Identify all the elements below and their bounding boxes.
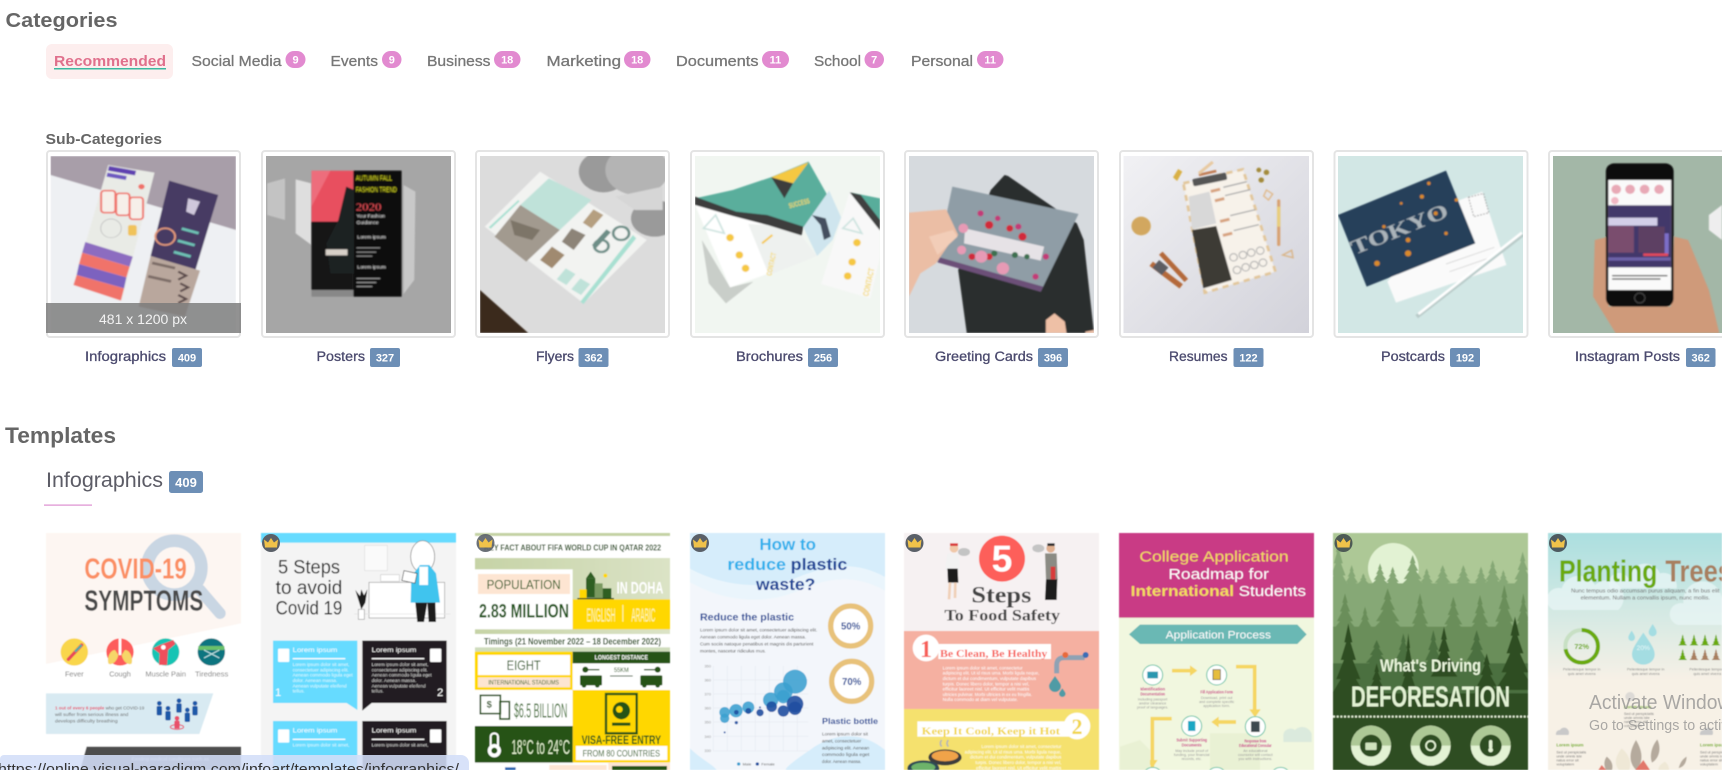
label: Resumes 122 — [1169, 348, 1264, 367]
bubble chart: 360 — [704, 706, 712, 711]
step 2: adipiscing elit. Ut id risus urna. Morbi ligula neque, — [965, 749, 1061, 754]
text: Plastic bottle: adipiscing elit. Aenean — [822, 745, 870, 750]
step 2 card: Lorem ipsum dolor sit amet, — [372, 662, 428, 667]
crown badge: card 4 — [691, 534, 709, 552]
title: How to reduce plastic waste?: reduce — [727, 555, 786, 574]
step 2 card: Aenean commodo ligula eget — [372, 673, 433, 678]
step: Response from Educational Consular: you with instructions. — [1238, 757, 1272, 761]
tab: Documents: Documents — [676, 53, 758, 70]
tab: Personal: 11 — [984, 54, 996, 66]
title: What's Driving: What's Driving — [1380, 656, 1481, 676]
header panel: Roadmap for — [1168, 566, 1269, 583]
heading: Templates: Templates — [5, 423, 116, 448]
intro text: Nunc tempus odio accumsan purus aliquam, a fin bus elit — [1571, 588, 1720, 594]
text: Reduce the plastic — [700, 613, 817, 654]
sub-category card: Flyers — [476, 145, 678, 367]
stat: 72% ring: 72% — [1574, 642, 1589, 651]
step: Fill Application Form: application form. — [1203, 704, 1230, 708]
step: Submit Supporting Documents: May include proof of — [1175, 749, 1209, 753]
callout: 1 out of every 6 people — [46, 693, 213, 734]
big 5 badge — [979, 536, 1025, 582]
icon: machinery ring — [1351, 726, 1391, 766]
step 2: dictum et dui condimentum, vulputate dapibus — [970, 755, 1062, 760]
ring: 70% — [832, 661, 872, 701]
step 3 card — [273, 721, 357, 770]
tab: Marketing — [546, 51, 650, 70]
visa panel — [573, 690, 670, 763]
info block: center: voluptatem — [1624, 724, 1642, 728]
label: Instagram Posts 362: Instagram Posts — [1575, 349, 1680, 364]
wave header — [690, 533, 885, 598]
label: Greeting Cards 396: Greeting Cards — [935, 349, 1033, 364]
forest layers — [1328, 540, 1535, 770]
info block: center — [1624, 692, 1654, 728]
crown badge: card 5 — [906, 534, 924, 552]
info block: center: natus error sit — [1624, 720, 1646, 724]
thumbnail: fashion poster on concrete: Your Fashion — [357, 214, 385, 219]
text: Plastic bottle: Plastic bottle — [822, 716, 878, 726]
illustration: doctor at desk — [354, 541, 451, 622]
longest distance panel: LONGEST DISTANCE — [595, 655, 648, 662]
text: Reduce the plastic: Lorem ipsum dolor sit amet, consectetuer adipiscing elit. — [700, 628, 817, 633]
size overlay: 481 x 1200 px — [46, 303, 241, 333]
tab: Social Media: 9 — [292, 54, 299, 66]
step 1 — [913, 635, 1089, 702]
illustration: waiter — [1032, 543, 1058, 600]
icon: tiredness — [198, 638, 225, 666]
header panel: Students — [1239, 583, 1306, 600]
step: Identification Documentation: including passport — [1138, 697, 1167, 701]
tab: Business: 18 — [501, 54, 513, 66]
label: Infographics 409: Infographics — [85, 349, 166, 364]
next step circles — [1143, 767, 1291, 770]
label: Infographics 409 — [85, 348, 202, 367]
size overlay: 481 x 1200 px: 481 x 1200 px — [99, 312, 187, 327]
text: Plastic bottle: commodo ligula eget — [822, 752, 870, 757]
thumbnail: Tokyo postcard — [1338, 156, 1523, 333]
sub-category card: Instagram Posts — [1549, 151, 1722, 367]
intro text: elementum. Nullam a convallis ipsum, nunc mollis. — [1581, 595, 1710, 601]
thumbnail: fashion poster on concrete: Lorem ipsum — [357, 235, 386, 240]
thumbnail: fashion poster on concrete — [266, 156, 451, 333]
crown badge: card 8 — [1549, 534, 1567, 552]
icon: people group — [157, 698, 198, 722]
stat: 20% water drop: Pellentesque tempor in — [1627, 668, 1664, 672]
step 1: adipiscing elit. Ut id risus urna. Morbi ligula neque, — [943, 671, 1039, 676]
bubble chart: 350 — [704, 664, 712, 669]
step 2: turpis. Donec libero dolor, tempor a nisi vel, — [975, 760, 1061, 765]
label: Greeting Cards 396 — [935, 348, 1068, 367]
step 4 card: Lorem ipsum — [372, 728, 417, 735]
info block: center: Sed ut perspiciatis — [1624, 712, 1654, 716]
tab: Personal: Personal — [911, 53, 973, 70]
tab: Social Media: Social Media — [192, 53, 282, 70]
label: Instagram Posts 362: 362 — [1692, 352, 1710, 364]
callout: 1 out of every 6 people: 1 out of every 6 people — [55, 706, 105, 711]
thumbnail: resume on clipboard — [1124, 156, 1309, 333]
thumbnail: infographic mockups — [50, 156, 236, 316]
symptom labels: Cough — [109, 670, 131, 679]
label: Postcards 192: 192 — [1456, 352, 1474, 364]
Activate Windows watermark — [1589, 692, 1722, 734]
template: 5 Steps to avoid Covid 19 — [261, 533, 456, 770]
budget panel: $ — [487, 700, 493, 710]
label: Postcards 192: Postcards — [1381, 349, 1445, 364]
step 1 card: Aenean commodo ligula eget — [293, 673, 354, 678]
step 2: 2 — [1072, 714, 1082, 739]
template: How to reduce plastic waste — [690, 533, 885, 770]
symptom labels: Muscle Pain — [145, 670, 186, 679]
stat: 20% water drop — [1627, 624, 1664, 676]
stat: tree counts — [1678, 634, 1722, 676]
title: Steps: Steps — [971, 583, 1031, 609]
tab: Recommended — [46, 44, 173, 79]
title: How to reduce plastic waste?: waste? — [755, 575, 815, 594]
title: 5 Steps to avoid Covid 19: to avoid — [276, 578, 342, 599]
title: 5 Steps to avoid Covid 19: 5 Steps — [278, 557, 340, 578]
template: FIFA World Cup facts — [475, 533, 670, 770]
thumbnail: teal flyer on marble table — [480, 156, 665, 333]
template: Planting Trees — [1547, 533, 1722, 770]
Doha panel: ENGLISH — [587, 605, 615, 626]
label: Resumes 122: Resumes — [1169, 349, 1228, 364]
step: Response from Educational Consular: counselor will contact — [1238, 753, 1273, 757]
tab: Marketing: Marketing — [546, 53, 621, 70]
magnifier — [147, 541, 220, 613]
text: Reduce the plastic: montes, nascetur ridiculus mus. — [700, 649, 766, 654]
info block: left — [1556, 728, 1586, 766]
tab: Events: Events — [330, 53, 378, 70]
info block: left: voluptatem — [1556, 762, 1574, 766]
step 2 card — [362, 641, 447, 711]
info block: left: Lorem ipsum — [1556, 743, 1584, 748]
tab: Events — [330, 51, 402, 70]
tab: Documents: 11 — [770, 54, 781, 66]
step 1: Be Clean, Be Healthy — [940, 649, 1048, 660]
title: 5 Steps to avoid Covid 19: Covid 19 — [276, 599, 342, 620]
label: Postcards 192 — [1381, 348, 1480, 367]
info block: center: unde omnis iste — [1624, 716, 1650, 720]
step: Identification Documentation: and/or clearance — [1139, 701, 1166, 705]
tab: School: School — [814, 53, 861, 70]
step: Fill Application Form: Fill Application Form — [1200, 689, 1233, 694]
template: COVID-19 Symptoms — [46, 533, 241, 770]
step 1: 1 — [920, 637, 932, 663]
thumbnail: fashion poster on concrete: 2020 — [356, 202, 382, 213]
big 5 badge: 5 — [992, 538, 1012, 580]
label: Posters 327: 327 — [376, 352, 394, 364]
bubble chart: Male — [743, 761, 752, 766]
step: Identification Documentation: Documentation — [1140, 691, 1165, 696]
step 2 card: tellus. — [372, 689, 384, 694]
tab: Business — [427, 51, 520, 70]
browser status bar URL — [0, 755, 469, 770]
title: To Food Safety: To Food Safety — [944, 608, 1060, 625]
step 1: efficitur laoreet nisl. Ut efficitur velit mattis — [943, 687, 1030, 692]
label: Brochures 256: Brochures — [736, 349, 803, 364]
label: Greeting Cards 396: 396 — [1044, 352, 1062, 364]
step: Submit Supporting Documents: records, etc. — [1182, 757, 1202, 761]
text: Reduce the plastic: Reduce the plastic — [700, 613, 794, 624]
heading: Sub-Categories: Sub-Categories — [46, 131, 162, 148]
step 1: Nulla commodo at diam vel vulputate. — [943, 697, 1018, 702]
banner: Application Process: Application Process — [1166, 630, 1271, 642]
crown badge: card 7 — [1334, 534, 1352, 552]
stadiums panel: INTERNATIONAL STADIUMS — [488, 680, 559, 687]
budget panel — [475, 690, 573, 726]
stat: 72% ring: quis amet viverra — [1568, 672, 1597, 676]
info block: right — [1700, 728, 1722, 766]
bubble chart: 350 — [704, 720, 712, 725]
callout: 1 out of every 6 people: who get COVID-19 — [106, 706, 145, 711]
tab: Documents — [676, 51, 789, 70]
thumbnail: greeting card and black envelope — [909, 156, 1094, 333]
step: Submit Supporting Documents — [1174, 716, 1210, 761]
step: Response from Educational Consular: Response from — [1244, 739, 1266, 744]
header panel: International — [1131, 583, 1234, 600]
info block: right: voluptatem — [1700, 762, 1718, 766]
bubble chart: 370 — [704, 692, 712, 697]
bottom wave — [690, 736, 885, 770]
step: Identification Documentation: proof of languages. — [1137, 705, 1168, 709]
stat: 20% water drop: 20% — [1637, 645, 1650, 652]
clouds — [1547, 564, 1722, 625]
stadiums panel: EIGHT — [507, 657, 541, 673]
population panel: 2.83 MILLION — [479, 601, 569, 622]
template: What's Driving Deforestation — [1328, 533, 1535, 770]
info block: right: natus error sit — [1700, 758, 1722, 762]
step 2 card: consectetuer adipiscing elit. — [372, 667, 428, 672]
icon: fever — [61, 638, 88, 666]
longest distance panel — [573, 652, 670, 690]
ring: 70%: 70% — [842, 677, 862, 688]
population panel: POPULATION — [487, 577, 561, 592]
title: 5 Steps to avoid Covid 19 — [276, 557, 342, 620]
banner: Application Process — [1129, 625, 1307, 644]
ring: 50%: 50% — [841, 622, 861, 633]
step: Submit Supporting Documents: funding, your financial — [1174, 753, 1210, 757]
step 1 card: tellus. — [293, 689, 305, 694]
heading: Categories: Categories — [6, 10, 118, 32]
step 2 card: dolor. Aenean massa. — [372, 678, 416, 683]
template: FIFA World Cup facts: $6.5 BILLION — [514, 700, 567, 722]
step 1: dictum et dui condimentum, vulputate dapibus — [943, 676, 1037, 681]
header panel — [1119, 533, 1314, 618]
title: COVID-19: COVID-19 — [84, 553, 187, 585]
temperature panel: 18°C to 24°C — [511, 737, 570, 759]
illustration: pots — [907, 740, 962, 770]
ring: 50% — [831, 606, 871, 646]
thumbnail: tri-fold brochures: CONTACT — [861, 267, 876, 297]
tab: School — [814, 51, 884, 70]
thumbnail: fashion poster on concrete: Lorem ipsum — [357, 265, 386, 270]
thumbnail: Tokyo postcard: TOKYO — [1347, 199, 1452, 260]
intro text — [1571, 588, 1720, 601]
label: Posters 327: Posters — [316, 349, 365, 364]
title: How to reduce plastic waste?: plastic — [791, 555, 847, 574]
icon: cough — [106, 638, 134, 666]
step 1: Lorem ipsum dolor sit amet, consectetur — [943, 665, 1023, 670]
sub-category card: Brochures — [691, 151, 884, 367]
subheading: Infographics 409 — [44, 469, 203, 506]
step: Response from Educational Consular: Educational Consular — [1239, 743, 1272, 748]
step 2: Lorem ipsum dolor sit amet, consectetur — [981, 744, 1062, 749]
icon: sun ring — [1411, 726, 1451, 766]
Doha panel — [573, 572, 670, 629]
step: Submit Supporting Documents: Submit Supporting — [1176, 738, 1207, 743]
symptom labels: Fever — [65, 670, 84, 679]
thumbnail: fashion poster on concrete: FASHION TREND — [356, 186, 397, 194]
step: Response from Educational Consular: An educational — [1243, 749, 1268, 753]
step: Response from Educational Consular — [1238, 717, 1273, 761]
thumbnail: fashion poster on concrete: AUTUMN FALL — [356, 174, 392, 182]
step 1 card: Aenean vulputate eleifend — [293, 683, 347, 688]
info block: left: Sed ut perspiciatis — [1556, 750, 1586, 754]
flow arrows — [1152, 667, 1255, 769]
label: Posters 327 — [316, 348, 400, 367]
sub-category card: Greeting Cards — [905, 151, 1098, 367]
dark panel — [80, 747, 241, 770]
tab: Recommended: Recommended — [54, 53, 166, 70]
step 1 card: Lorem ipsum dolor sit amet, — [293, 662, 349, 667]
sub-category card: Posters — [262, 151, 455, 367]
text: Plastic bottle: dolor. Aenean massa. — [822, 759, 861, 764]
step 4 card: Lorem ipsum dolor sit amet, — [372, 743, 428, 748]
label: Instagram Posts 362 — [1575, 348, 1716, 367]
tab: Marketing: 18 — [631, 54, 643, 66]
stadiums panel — [475, 652, 573, 690]
label: Brochures 256: 256 — [814, 352, 832, 364]
text: Reduce the plastic: Aenean commodo ligula eget dolor. Aenean massa. — [700, 635, 806, 640]
population panel — [475, 569, 573, 629]
info block: left: natus error sit — [1556, 758, 1579, 762]
label: Flyers 362: 362 — [584, 352, 603, 364]
subheading: Infographics 409: Infographics — [46, 469, 163, 492]
symptom labels: Tiredness — [195, 670, 229, 679]
longest distance panel: 55KM — [614, 667, 629, 674]
template: College Application Roadmap — [1119, 533, 1314, 770]
step: Fill Application Form — [1199, 665, 1234, 708]
tab: Business: Business — [427, 53, 490, 70]
subheading: Infographics 409: 409 — [175, 475, 197, 490]
step 2 card: Lorem ipsum — [372, 647, 417, 654]
step: Submit Supporting Documents: Documents — [1182, 743, 1202, 748]
callout: 1 out of every 6 people: will suffer from serious illness and — [55, 712, 129, 717]
text: Plastic bottle: Lorem ipsum dolor sit — [822, 732, 869, 737]
bottom row — [475, 763, 670, 770]
step 1 card: 1 — [275, 687, 281, 699]
template: 5 Steps To Food Safety — [904, 533, 1099, 770]
thumbnail: tri-fold brochures: SUCCESS — [788, 196, 811, 210]
step 1: turpis. Donec libero dolor, tempor a nisi vel, — [943, 681, 1029, 686]
step 3 card: Lorem ipsum dolor sit amet, — [293, 743, 349, 748]
sub-category card: Postcards — [1334, 151, 1528, 367]
icon: thermometer ring — [1471, 726, 1511, 766]
step: Fill Application Form: and complete specific — [1199, 700, 1234, 704]
title: How to reduce plastic waste?: How to — [759, 535, 816, 554]
header panel: College Application — [1139, 548, 1289, 565]
stat: 72% ring: Pellentesque tempor in — [1563, 668, 1600, 672]
step 1: ultricies pulvinar. Morbi ultricies in ex eu fringilla. — [943, 692, 1032, 697]
tab: Social Media — [192, 51, 306, 70]
info block: center: Lorem ipsum — [1624, 704, 1651, 709]
step 2 card: Aenean vulputate eleifend — [372, 683, 426, 688]
step 1 card: Lorem ipsum — [293, 647, 338, 654]
callout: 1 out of every 6 people: develops difficulty breathing — [55, 719, 118, 724]
step: Identification Documentation — [1137, 665, 1168, 709]
label: Infographics 409: 409 — [178, 352, 196, 364]
label: Brochures 256 — [736, 348, 838, 367]
text: Plastic bottle: amet, consectetuer — [822, 738, 862, 743]
step 1 card: dolor. Aenean massa. — [293, 678, 337, 683]
tab: Personal — [911, 51, 1004, 70]
title: Planting Trees: Planting — [1559, 555, 1657, 589]
stat: 72% ring — [1563, 630, 1600, 676]
step: Identification Documentation: Identification — [1140, 687, 1165, 692]
bubble chart — [704, 664, 808, 766]
step 2 — [907, 713, 1090, 770]
crown badge: card 2 — [262, 534, 280, 552]
dark panel: Existing medical conditions such as — [132, 757, 209, 762]
bubble chart: Female — [761, 761, 775, 766]
thumbnail: fashion poster on concrete: Guidance — [357, 220, 379, 226]
info block: left: unde omnis iste — [1556, 754, 1582, 758]
label: Resumes 122: 122 — [1239, 352, 1258, 364]
symptom labels — [65, 670, 229, 679]
step 1 card — [273, 641, 357, 710]
illustration: waitress — [945, 543, 970, 599]
thumbnail: tri-fold brochures — [695, 156, 880, 333]
step: Fill Application Form: Download, print out — [1201, 696, 1232, 700]
sub-category card: Resumes — [1120, 151, 1313, 367]
thumbnail: phone in hand — [1553, 156, 1722, 333]
bubble chart: 330 — [704, 748, 712, 753]
tab: School: 7 — [871, 54, 877, 66]
step 2 card: 2 — [437, 687, 443, 699]
faint city background — [1120, 727, 1312, 770]
step 2: Keep It Cool, Keep it Hot — [922, 725, 1060, 737]
premium crown badges — [262, 534, 1567, 552]
category tabs — [46, 44, 1004, 79]
label: Flyers 362: Flyers — [536, 349, 574, 364]
step 1 card: consectetuer adipiscing elit. — [293, 667, 349, 672]
step 3 card: Lorem ipsum — [293, 728, 338, 735]
leaves illustration — [1598, 739, 1687, 770]
icon: dripping faucet — [1049, 652, 1089, 697]
sub-category card: Infographics — [46, 151, 241, 367]
tab: Events: 9 — [389, 54, 395, 66]
step 4 card — [362, 721, 447, 770]
stat: 20% water drop: quis amet viverra — [1632, 672, 1661, 676]
text: Plastic bottle — [822, 716, 878, 764]
thumbnail: tri-fold brochures: CONTACT — [764, 251, 778, 276]
title: How to reduce plastic waste? — [727, 535, 847, 594]
label: Flyers 362 — [536, 348, 608, 367]
stat: tree counts: quis amet viverra — [1693, 672, 1722, 676]
bubble chart: 360 — [704, 678, 712, 683]
icon: muscle pain — [152, 638, 179, 666]
temperature panel — [475, 726, 573, 763]
bubble chart: 340 — [704, 734, 712, 739]
crown badge: card 3 — [476, 534, 494, 552]
text: Reduce the plastic: Cum sociis natoque penatibus et magnis dis parturient — [700, 642, 814, 647]
